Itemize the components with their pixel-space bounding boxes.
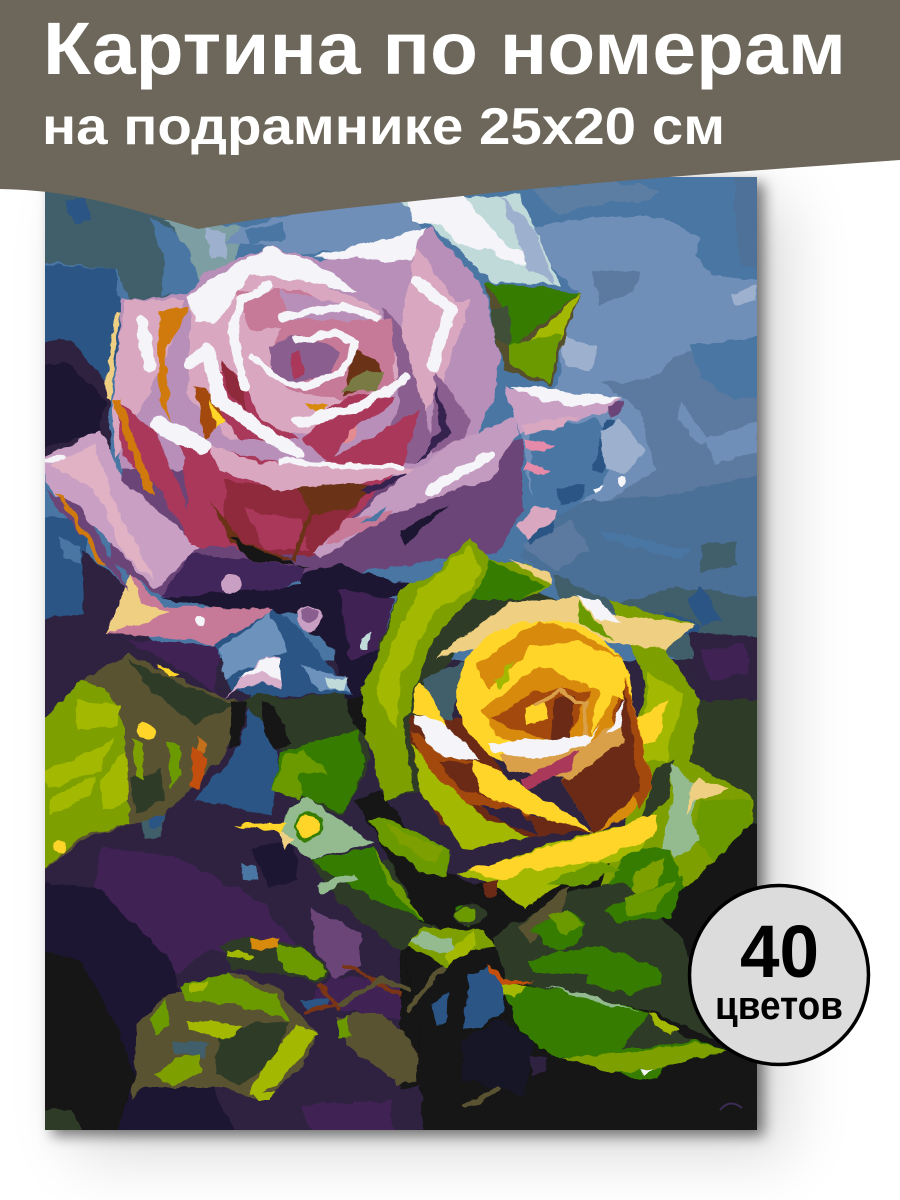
- yellow rose: left and lower petals: [369, 683, 659, 925]
- lower-right leaves: [407, 875, 725, 1080]
- badge number: 40: [740, 910, 819, 993]
- small arc mark: [720, 1103, 742, 1110]
- big left leaf: [45, 652, 242, 869]
- water drops: [195, 478, 626, 924]
- pink rose: outer petals: [45, 385, 622, 700]
- badge: 40 colours: [690, 886, 868, 1064]
- header banner: [0, 0, 900, 229]
- yellow rose: petals: [410, 595, 755, 920]
- pink rose: head: [105, 228, 499, 563]
- painting: two roses on canvas: [30, 160, 780, 1145]
- sky background: [30, 160, 780, 660]
- heading: Картина по номерам: [43, 7, 846, 90]
- top-right green leaf: [484, 283, 582, 387]
- left green leaf: [232, 730, 424, 920]
- canvas drop shadow: [45, 177, 757, 1130]
- subheading: на подрамнике 25х20 см: [42, 98, 725, 156]
- badge label: цветов: [715, 984, 843, 1028]
- dark purple and black ground: [30, 340, 775, 1145]
- yellow rose: green outer sepal: [362, 537, 580, 800]
- pink rose: lower right petal: [230, 417, 519, 567]
- lower leaves: [132, 937, 425, 1100]
- pink rose: white highlights: [45, 228, 490, 490]
- stems and dark lower centre: [229, 692, 610, 1130]
